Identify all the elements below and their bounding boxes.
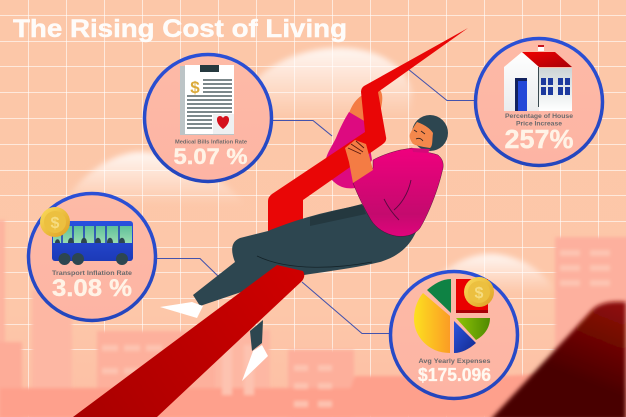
value: house price: 257% — [504, 124, 574, 154]
sleeve behind arrow — [325, 112, 372, 188]
icon: house — [504, 45, 572, 111]
person climbing the arrow — [73, 28, 468, 417]
label: house price: Percentage of House — [505, 113, 573, 120]
icon: coin: $ — [51, 215, 60, 232]
legs — [193, 204, 416, 351]
sweater — [353, 148, 443, 236]
clouds — [62, 48, 555, 292]
value: medical bills: 5.07 % — [174, 144, 248, 169]
icon: coin: $ — [475, 285, 484, 302]
lower hand — [345, 140, 373, 183]
panel: house price — [476, 38, 602, 166]
sweater folds — [384, 180, 411, 220]
label: house price line two: Price Increase — [516, 120, 562, 128]
fingers — [348, 141, 364, 154]
pie chart — [414, 279, 490, 353]
raised hand — [348, 90, 382, 126]
leader lines — [155, 69, 476, 334]
label: medical bills: Medical Bills Inflation Rate — [175, 140, 247, 146]
head — [410, 115, 448, 153]
value: transport: 3.08 % — [52, 275, 132, 302]
label: transport: Transport Inflation Rate — [52, 270, 132, 277]
panel: yearly expenses — [390, 272, 518, 398]
foreground blurred red arrow — [490, 302, 626, 417]
panel: transport — [28, 194, 156, 320]
blurred city skyline — [0, 220, 626, 417]
icon: medical bill document: $ — [190, 78, 200, 97]
icon: bus — [52, 221, 133, 265]
shoes — [160, 302, 268, 381]
title: The Rising Cost of Living — [13, 15, 347, 43]
icon: heart — [217, 116, 229, 129]
value: expenses: $175.096 — [418, 365, 491, 385]
panel: medical bills — [144, 54, 272, 182]
upper arrow — [268, 28, 468, 240]
label: expenses: Avg Yearly Expenses — [418, 358, 491, 365]
lower arrow — [73, 265, 304, 417]
